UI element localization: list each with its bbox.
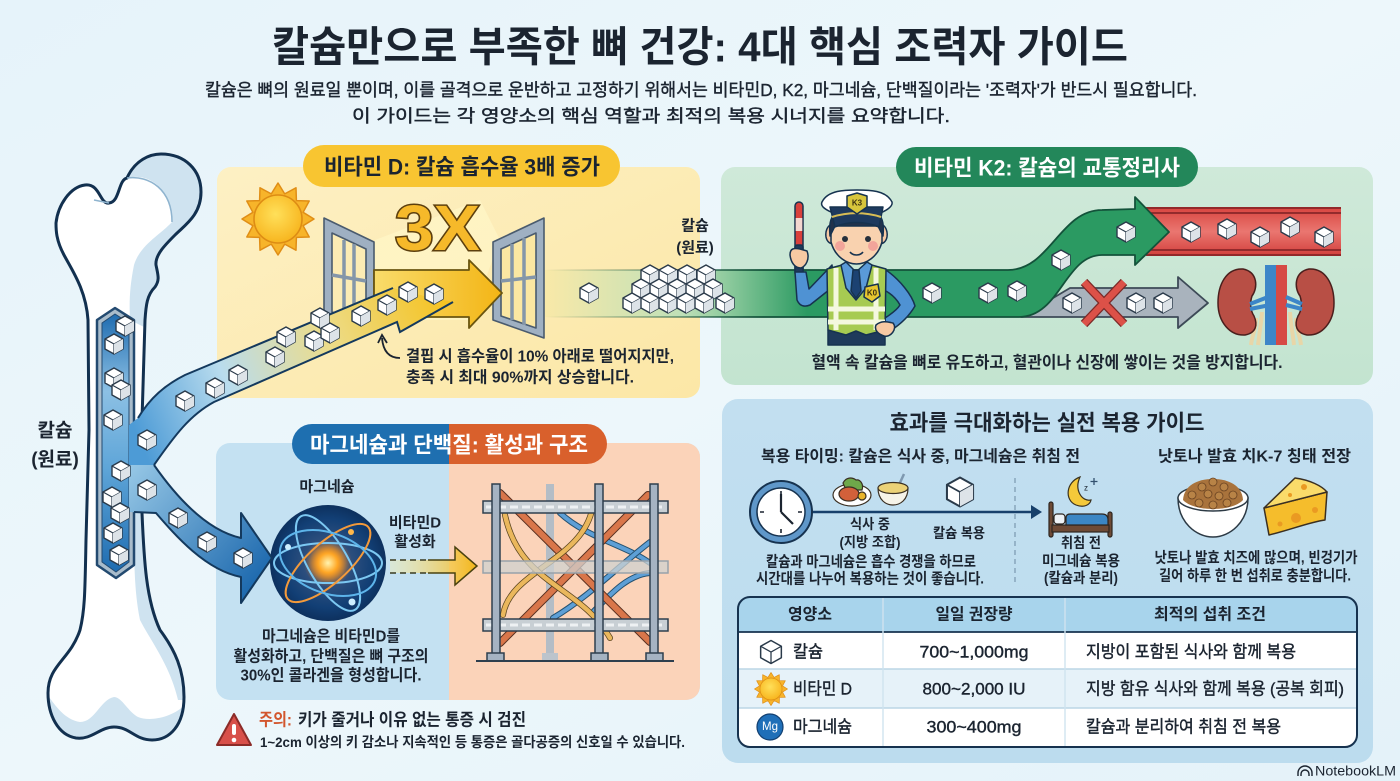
title: 칼슘만으로 부족한 뼈 건강: 4대 핵심 조력자 가이드 bbox=[272, 24, 1128, 70]
magnesium text: 활성화하고, 단백질은 뼈 구조의 bbox=[234, 648, 428, 666]
raised arm bbox=[795, 265, 834, 306]
magnesium text bbox=[234, 628, 428, 684]
row: vitamin D: 지방 함유 식사와 함께 복용 (공복 회피) bbox=[1086, 680, 1344, 698]
icon: clock bbox=[750, 481, 812, 543]
calcium source label: (원료) bbox=[676, 240, 714, 256]
row: magnesium: 칼슘과 분리하여 취침 전 복용 bbox=[1086, 718, 1281, 736]
pill heading: magnesium and protein: 마그네슘과 단백질: 활성과 구조 bbox=[310, 432, 588, 458]
natto note bbox=[1154, 550, 1358, 584]
cap bbox=[822, 190, 892, 214]
icon: moon bbox=[1068, 477, 1098, 506]
icon: red cross bbox=[1084, 282, 1124, 324]
icon: cheese bbox=[1264, 478, 1327, 535]
warning block: 키가 줄거나 이유 없는 통증 시 검진 bbox=[298, 710, 526, 730]
bedtime label: 취침 전 bbox=[1061, 535, 1101, 552]
row: magnesium: 300~400mg bbox=[926, 718, 1022, 736]
row: magnesium: Mg bbox=[762, 721, 778, 733]
icon: sun bbox=[242, 183, 314, 255]
natto heading: 낫토나 발효 치K-7 칭태 전장 bbox=[1158, 448, 1351, 466]
row: calcium: 지방이 포함된 식사와 함께 복용 bbox=[1086, 642, 1296, 662]
timing note: 칼슘과 마그네슘은 흡수 경쟁을 하므로 bbox=[766, 554, 976, 570]
bedtime label: 미그네슘 복용 bbox=[1042, 553, 1120, 570]
intro text: 이 가이드는 각 영양소의 핵심 역할과 최적의 복용 시너지를 요약합니다. bbox=[352, 106, 950, 126]
natto note: 길어 하루 한 번 섭취로 충분합니다. bbox=[1159, 568, 1351, 584]
panel: vitamin K2 bbox=[545, 147, 1373, 385]
vitamin D activation label: 비타민D bbox=[389, 514, 441, 532]
warning block: 1~2cm 이상의 키 감소나 지속적인 등 통증은 골다공증의 신호일 수 있습니다. bbox=[260, 734, 685, 750]
calcium cubes in arrows bbox=[103, 282, 443, 568]
baton bbox=[795, 202, 803, 275]
NotebookLM mark: NotebookLM bbox=[1315, 764, 1396, 778]
arrow: green path to bone bbox=[545, 197, 1169, 317]
icon: left gate bbox=[324, 218, 374, 330]
safety vest bbox=[827, 264, 886, 335]
timeline arrow bbox=[808, 505, 1042, 519]
row: vitamin D: 800~2,000 IU bbox=[922, 680, 1026, 698]
magnesium label: 마그네슘 bbox=[299, 478, 355, 496]
bedtime label: (칼슘과 분리) bbox=[1044, 570, 1118, 587]
arrow: activation bbox=[390, 547, 477, 585]
arrow: yellow absorption arrow bbox=[374, 260, 502, 328]
pill heading: vitamin D bbox=[303, 145, 620, 187]
meal label bbox=[840, 516, 900, 550]
row: calcium: 칼슘 bbox=[793, 642, 823, 662]
vitamin D note bbox=[378, 335, 674, 386]
artery bbox=[1146, 207, 1341, 256]
marrow channel bbox=[97, 308, 134, 578]
row: vitamin D bbox=[754, 672, 1344, 706]
calcium source cube pile bbox=[580, 265, 734, 313]
table header: 일일 권장량 bbox=[936, 606, 1013, 624]
hand bbox=[790, 249, 808, 268]
calcium source label bbox=[676, 218, 714, 256]
arrow: blocked grey path bbox=[1021, 277, 1208, 328]
arrow: calcium to magnesium bbox=[129, 465, 272, 603]
warning block bbox=[217, 710, 685, 750]
warning block: 주의: bbox=[259, 710, 292, 730]
panel: vitamin D bbox=[217, 145, 700, 398]
timing heading: 복용 타이밍: 칼슘은 식사 중, 마그네슘은 취침 전 bbox=[761, 448, 1080, 466]
table header: 최적의 섭취 조건 bbox=[1154, 606, 1266, 624]
magnesium text: 30%인 콜라겐을 형성합니다. bbox=[240, 666, 422, 684]
pill heading: magnesium and protein bbox=[292, 424, 607, 464]
table header: 영양소 bbox=[788, 606, 832, 624]
icon: magnesium atom bbox=[270, 505, 386, 621]
icon: calcium cube bbox=[947, 478, 973, 506]
K2 caption: 혈액 속 칼슘을 뼈로 유도하고, 혈관이나 신장에 쌓이는 것을 방지합니다. bbox=[812, 353, 1282, 372]
intro text bbox=[205, 80, 1197, 126]
meal label: 식사 중 bbox=[850, 516, 890, 532]
row: magnesium bbox=[757, 714, 1281, 740]
vitamin D note: 결핍 시 흡수율이 10% 아래로 떨어지지만, bbox=[406, 348, 674, 366]
icon: traffic officer K2 bbox=[790, 190, 915, 345]
intro text: 칼슘은 뼈의 원료일 뿐이며, 이를 골격으로 운반하고 고정하기 위해서는 비타민D, K2, 마그네슘, 단백질이라는 '조력자'가 반드시 필요합니다. bbox=[205, 80, 1197, 100]
icon: warning triangle bbox=[217, 714, 251, 745]
crossbars bbox=[483, 501, 668, 631]
3X label: 3X bbox=[395, 192, 480, 264]
nutrient table bbox=[738, 597, 1357, 747]
row: vitamin D: 비타민 D bbox=[793, 680, 852, 698]
meal label: (지방 조합) bbox=[840, 534, 900, 550]
icon: traffic officer K2: K3 bbox=[852, 198, 863, 208]
panel: magnesium and protein bbox=[216, 424, 700, 700]
panel: practical dosing guide bbox=[722, 399, 1373, 763]
vitamin D activation label: 활성화 bbox=[394, 534, 436, 550]
guide heading: 효과를 극대화하는 실전 복용 가이드 bbox=[890, 410, 1204, 436]
icon: moon: z bbox=[1084, 484, 1088, 492]
badge bbox=[864, 284, 880, 302]
calcium raw material label: (원료) bbox=[31, 448, 79, 470]
light rays bbox=[375, 200, 500, 320]
badge: K0 bbox=[867, 288, 878, 298]
row: calcium bbox=[761, 640, 1296, 664]
shirt and tie bbox=[841, 262, 872, 300]
vitamin D activation label bbox=[389, 514, 441, 550]
timing note bbox=[756, 554, 984, 588]
pill heading: K2 bbox=[896, 147, 1198, 187]
calcium cubes on K2 path bbox=[923, 217, 1333, 313]
icon: natto bowl bbox=[1178, 478, 1248, 537]
magnesium text: 마그네슘은 비타민D를 bbox=[262, 628, 400, 646]
timing note: 시간대를 나누어 복용하는 것이 좋습니다. bbox=[756, 570, 984, 588]
table header bbox=[788, 606, 1266, 624]
row: magnesium: 마그네슘 bbox=[793, 718, 852, 736]
icon: right gate bbox=[493, 218, 544, 338]
row: calcium: 700~1,000mg bbox=[920, 642, 1028, 662]
collagen scaffold diagram bbox=[476, 484, 674, 661]
icon: kidneys bbox=[1218, 265, 1334, 345]
icon: bed bbox=[1049, 502, 1112, 537]
vitamin D note: 충족 시 최대 90%까지 상승합니다. bbox=[406, 368, 634, 386]
pants bbox=[828, 330, 885, 345]
arrow: calcium to vitamin D bbox=[129, 288, 453, 470]
head bbox=[826, 225, 887, 244]
icon: soup bowl bbox=[878, 474, 908, 505]
calcium raw material label bbox=[31, 420, 79, 470]
calcium dose label: 칼슘 복용 bbox=[933, 525, 985, 541]
columns bbox=[487, 484, 663, 661]
pill heading: vitamin D: 비타민 D: 칼슘 흡수율 3배 증가 bbox=[324, 154, 600, 180]
icon: meal plate bbox=[833, 478, 871, 506]
pill heading: K2: 비타민 K2: 칼슘의 교통정리사 bbox=[914, 156, 1180, 180]
bone illustration bbox=[46, 152, 202, 742]
bedtime label bbox=[1042, 535, 1120, 587]
natto note: 낫토나 발효 치즈에 많으며, 빈겅기가 bbox=[1154, 550, 1358, 566]
torso arm bbox=[882, 270, 915, 331]
calcium raw material label: 칼슘 bbox=[38, 420, 72, 442]
calcium source label: 칼슘 bbox=[681, 218, 709, 234]
